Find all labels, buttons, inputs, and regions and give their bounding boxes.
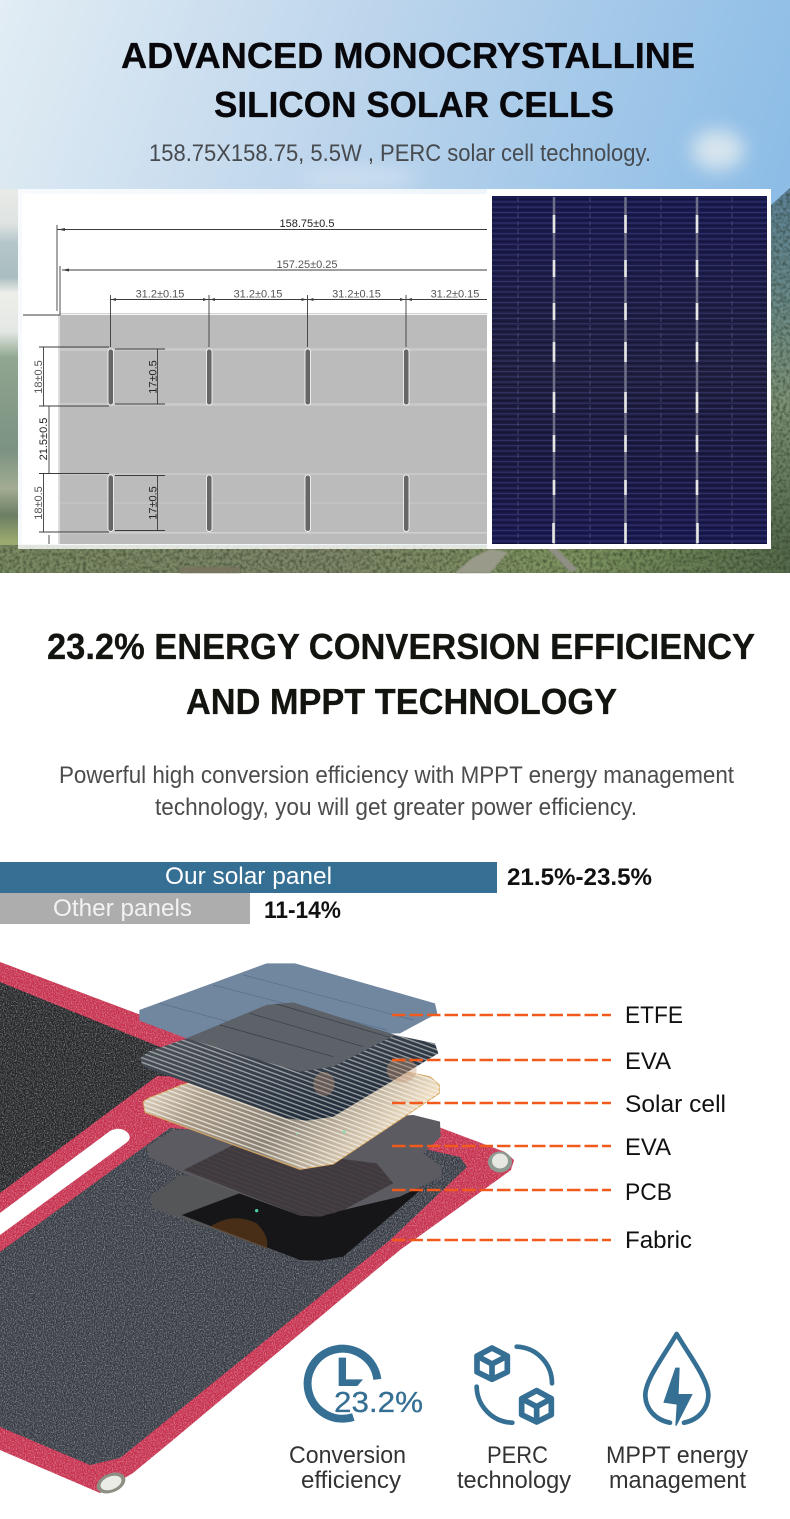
- icon: PERC technology cubes: [477, 1347, 552, 1423]
- icon: MPPT energy drop with lightning bolt: [645, 1334, 708, 1426]
- body text: Powerful high conversion efficiency with MPPT energy management: [59, 762, 734, 789]
- body text: [59, 762, 734, 821]
- grommet bottom: [94, 1469, 128, 1497]
- layer labels: EVA: [625, 1048, 671, 1075]
- heading: efficiency: [47, 626, 755, 722]
- label: PERC technology: [457, 1442, 571, 1494]
- layer labels: Fabric: [625, 1227, 692, 1254]
- dimension labels: 17±0.5: [148, 360, 160, 394]
- layer: upper EVA: [140, 1003, 438, 1121]
- dimension labels: 18±0.5: [33, 360, 45, 394]
- bar: our solar panel: 21.5%-23.5%: [507, 864, 652, 891]
- carrying slot: [0, 1129, 130, 1235]
- lower fabric: [0, 1128, 467, 1465]
- layer: solar cell: [143, 1050, 439, 1169]
- dimension lines: [23, 225, 487, 544]
- layer labels: [625, 1002, 726, 1254]
- dimension labels: [33, 218, 479, 520]
- heading: efficiency: AND MPPT TECHNOLOGY: [186, 681, 617, 722]
- label: MPPT energy management: management: [609, 1467, 746, 1494]
- dimension labels: 157.25±0.25: [276, 259, 338, 271]
- label: MPPT energy management: MPPT energy: [606, 1442, 748, 1469]
- subtitle: 158.75X158.75, 5.5W , PERC solar cell technology.: [149, 140, 651, 167]
- slots on the busbars: [108, 349, 409, 532]
- bar chart: conversion efficiency comparison: [0, 862, 652, 924]
- layer labels: EVA: [625, 1134, 671, 1161]
- dimension labels: 21.5±0.5: [38, 418, 50, 460]
- title: ADVANCED MONOCRYSTALLINE: [121, 35, 695, 76]
- title: [121, 35, 695, 125]
- bar: other panels: [0, 893, 341, 924]
- dimension labels: 31.2±0.15: [136, 288, 184, 300]
- dimension labels: 31.2±0.15: [431, 288, 479, 300]
- heading: efficiency: 23.2% ENERGY CONVERSION EFFICIENCY: [47, 626, 755, 667]
- layer: fabric: [150, 1175, 421, 1261]
- dimension labels: 31.2±0.15: [332, 288, 381, 300]
- bar: other panels: Other panels: [53, 895, 192, 922]
- label: conversion efficiency: efficiency: [301, 1467, 401, 1494]
- layer labels: Solar cell: [625, 1091, 726, 1118]
- hero background: sky and mountains: [0, 0, 790, 573]
- dimension labels: 158.75±0.5: [280, 218, 334, 230]
- label: PERC technology: PERC: [487, 1442, 548, 1469]
- title: SILICON SOLAR CELLS: [214, 84, 614, 125]
- bar: other panels: 11-14%: [264, 897, 341, 924]
- label: MPPT energy management: [606, 1442, 748, 1494]
- callout lines: layer leaders: [392, 1015, 611, 1240]
- solar panel board with red border: [0, 962, 514, 1497]
- photo of blue solar cell: [492, 196, 767, 544]
- layer: ETFE: [139, 963, 437, 1050]
- upper fabric: [0, 982, 240, 1193]
- bar: our solar panel: [0, 862, 652, 893]
- body text: technology, you will get greater power efficiency.: [155, 794, 637, 821]
- exploded solar panel layers: [139, 963, 442, 1261]
- bar: our solar panel: Our solar panel: [165, 863, 332, 890]
- dimension labels: 17±0.5: [148, 486, 160, 520]
- dimension arrows: [58, 228, 412, 301]
- label: PERC technology: technology: [457, 1467, 571, 1494]
- layer: lower EVA: [147, 1115, 442, 1217]
- layer labels: PCB: [625, 1179, 672, 1206]
- layer labels: ETFE: [625, 1002, 683, 1029]
- label: conversion efficiency: Conversion: [289, 1442, 406, 1469]
- grommet top right: [488, 1152, 512, 1172]
- technical drawing of cell dimensions: [23, 218, 487, 544]
- label: conversion efficiency: [289, 1442, 406, 1494]
- panel: image frame: [18, 189, 771, 549]
- dimension labels: 31.2±0.15: [234, 288, 282, 300]
- dimension labels: 18±0.5: [33, 486, 45, 520]
- icon: conversion efficiency clock: 23.2%: [334, 1387, 423, 1419]
- icon: conversion efficiency clock: [308, 1349, 423, 1419]
